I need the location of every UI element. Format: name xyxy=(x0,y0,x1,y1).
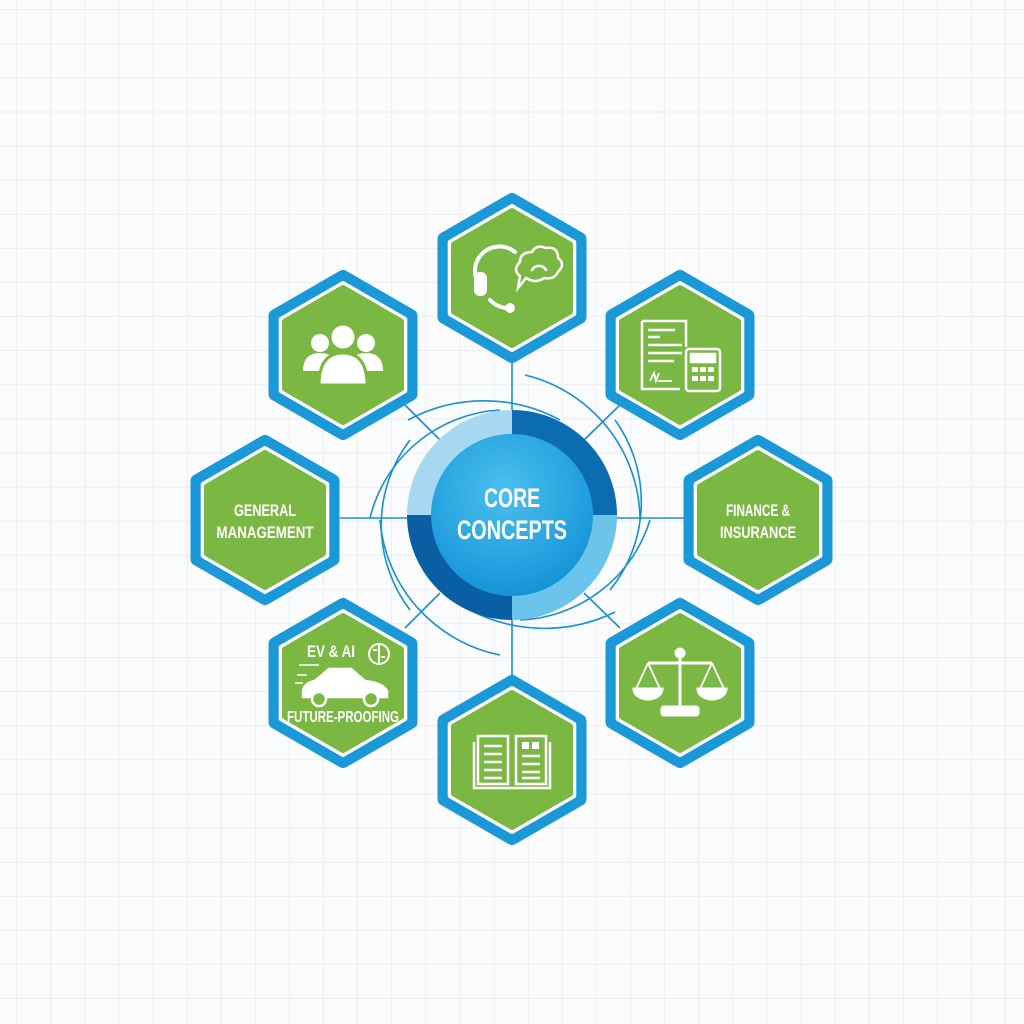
icon: headset and chat bubble xyxy=(475,246,562,311)
hexagon: EV & AI future-proofing (bottom-left) xyxy=(276,605,410,761)
hexagon: documents and calculator (top-right) xyxy=(612,277,748,433)
icon: scales of justice xyxy=(634,649,726,715)
icon: contract with calculator xyxy=(642,321,720,391)
hexagon: finance & insurance (right): INSURANCE xyxy=(720,523,796,542)
hexagon: general management (left) xyxy=(198,442,332,598)
center: core concepts circle: CONCEPTS xyxy=(457,515,567,545)
hexagon: team (top-left) xyxy=(276,277,410,433)
hexagon: finance & insurance (right) xyxy=(690,442,826,598)
connector lines xyxy=(340,360,684,676)
icon: car xyxy=(295,665,387,706)
hexagon: general management (left): GENERAL xyxy=(234,501,296,520)
hexagon: finance & insurance (right): FINANCE & xyxy=(726,501,790,520)
icon: open book xyxy=(474,736,550,788)
hexagon: knowledge book (bottom) xyxy=(444,682,580,838)
hexagon: general management (left): MANAGEMENT xyxy=(216,523,314,542)
hexagon: EV & AI future-proofing (bottom-left): EV & AI xyxy=(307,642,355,661)
center: core concepts circle: CORE xyxy=(484,483,540,513)
icon: brain xyxy=(369,644,389,664)
icon: people group xyxy=(303,324,383,385)
center: core concepts circle xyxy=(407,410,617,620)
hexagon: EV & AI future-proofing (bottom-left): FUTURE-PROOFING xyxy=(287,709,399,726)
hexagon: customer service (top) xyxy=(444,200,580,356)
hexagon: legal scales (bottom-right) xyxy=(612,605,748,761)
